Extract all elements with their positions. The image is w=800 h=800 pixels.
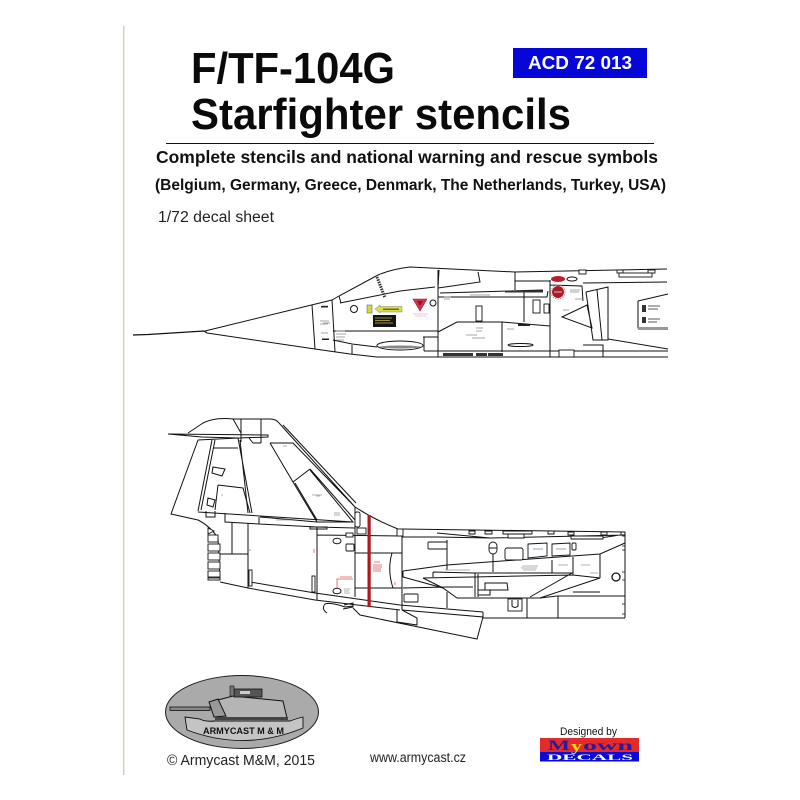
myown decals logo: own [583,739,633,754]
countries list: (Belgium, Germany, Greece, Denmark, The Netherlands, Turkey, USA) [155,177,666,194]
nose probe [133,331,207,335]
wing [403,540,625,598]
black warning placard [373,315,396,327]
fuselage spine lines [198,512,355,529]
red warning triangle [413,299,428,316]
intake window panel [638,294,668,330]
intake lip [562,287,608,340]
tank hull [217,696,287,718]
ventral fin [353,608,483,639]
drain hatch [508,599,522,611]
myown decals logo: y [571,739,583,755]
dark stencil bands [443,290,543,356]
fuselage outline [205,267,668,357]
product code badge [513,48,647,78]
designer credit: Designed by [560,726,617,738]
tick marks on rear frame [622,536,625,614]
wing root stencil text [445,565,598,573]
exhaust ribs [208,528,220,580]
lower aft panels [403,532,625,618]
oval badge [166,676,318,748]
copyright: © Armycast M&M, 2015 [167,753,315,769]
banner [185,717,303,741]
myown decals logo: DECALS [547,752,634,762]
small stencil text [320,290,582,340]
rear panel details [249,512,418,602]
banner text: ARMYCAST M & M [203,726,284,736]
panel lines [312,270,668,357]
frames [220,507,402,610]
top spine [402,529,625,538]
wing pylon detail [478,583,508,598]
title [191,44,571,139]
red rescue markers [551,276,565,299]
myown decals logo [540,738,639,762]
website: www.armycast.cz [369,750,466,765]
tank turret [209,699,226,717]
fin inspection panels [206,467,250,517]
stabilizer and fin tip [168,418,279,443]
subtitle: Complete stencils and national warning and rescue symbols [156,147,658,167]
armycast logo [166,676,318,748]
circle ports [350,300,436,312]
rivet dot port [612,573,620,581]
front fuselage side view [133,267,668,357]
product code badge: ACD 72 013 [528,52,632,73]
canopy [339,270,480,303]
title: F/TF-104G [191,44,395,93]
red separation stripe [368,515,371,607]
tank cupola [230,686,262,697]
red stencils [250,549,395,588]
lower fuselage edge [220,582,483,612]
tracks [215,717,288,720]
fuselage windows and hatches [428,542,576,572]
scale note: 1/72 decal sheet [158,209,275,226]
rear fuselage and tail side view [168,418,625,639]
fin and rudder [171,423,398,580]
title rule [166,143,654,144]
panel rectangles [476,270,655,357]
intake fairing ellipses [377,277,577,350]
yellow rescue arrow [367,305,402,313]
grey stencils [221,446,350,593]
title: Starfighter stencils [191,90,571,139]
tank gun [170,707,210,710]
tail hook [323,603,353,613]
myown decals logo: M [548,738,570,754]
spine fairings [469,531,625,539]
